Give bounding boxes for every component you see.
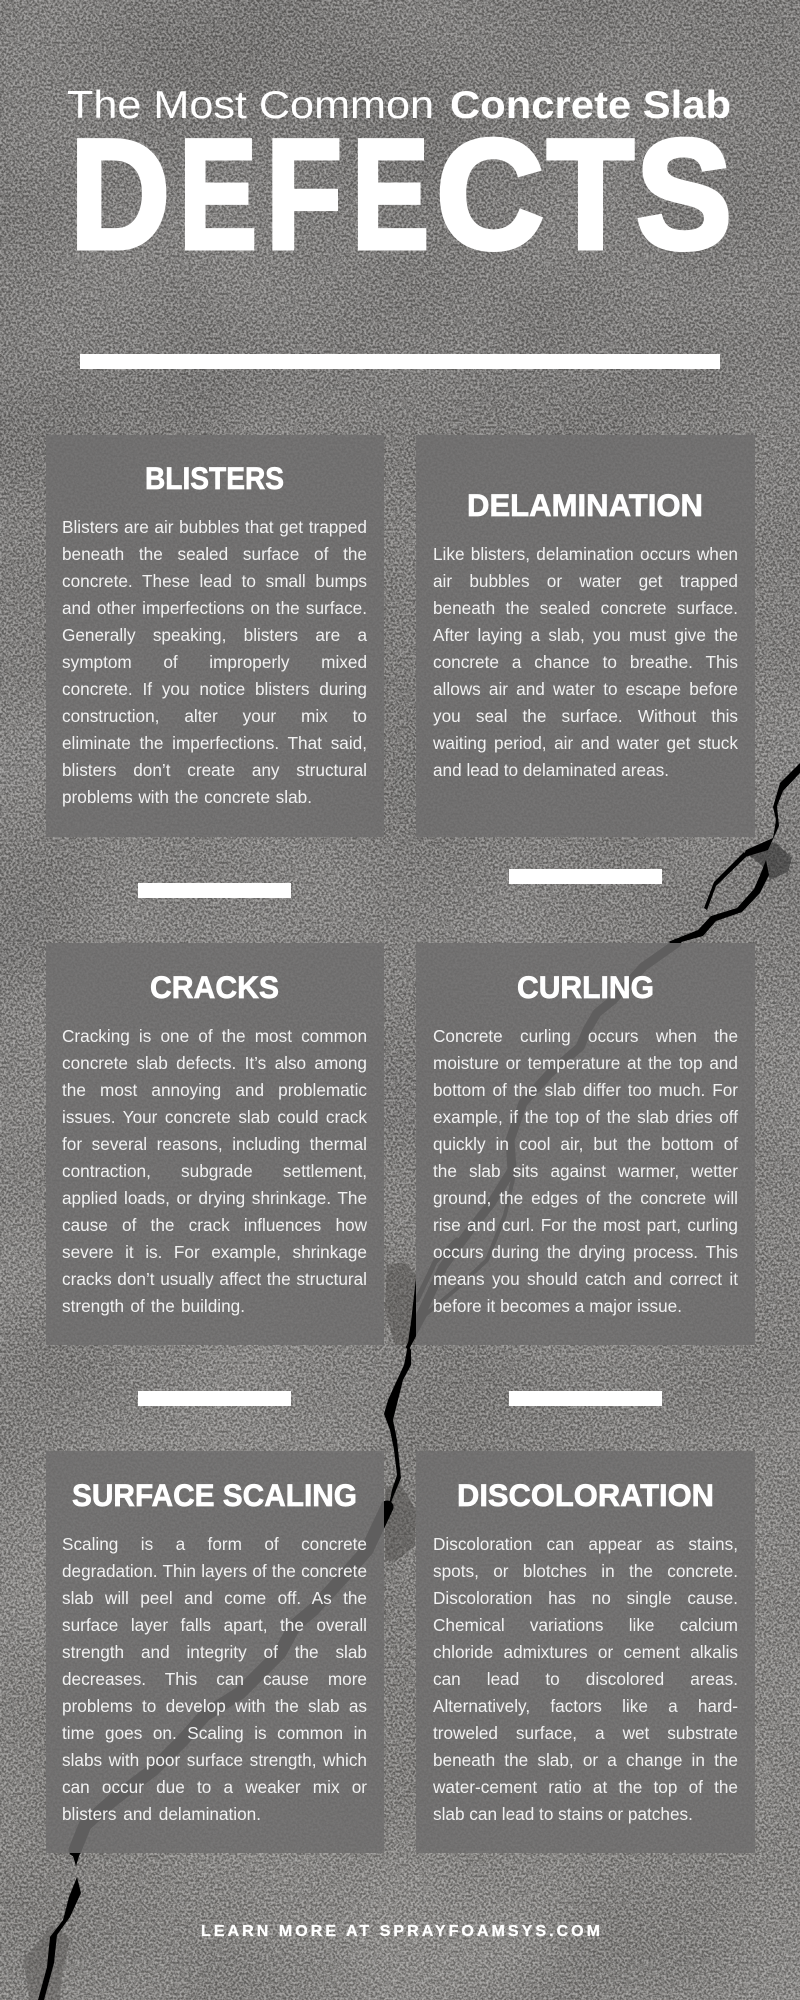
text: discoloration: can lead to discolored areas. [433, 1669, 738, 1689]
text: surface scaling: surface layer falls apart, the overall [62, 1615, 367, 1635]
panel: blisters [46, 435, 384, 837]
heading: defects: D [70, 108, 170, 282]
text: cracks: Cracking is one of the most common [62, 1026, 367, 1046]
heading: discoloration: DISCOLORATION [457, 1477, 714, 1513]
heading: curling: CURLING [517, 969, 654, 1005]
text: cracks: applied loads, or drying shrinkage. The [62, 1188, 367, 1208]
divider: right row 2 [509, 1391, 662, 1406]
crack: portion under panels [75, 943, 677, 1850]
panel: delamination [416, 435, 755, 837]
heading: surface scaling: SURFACE SCALING [72, 1477, 357, 1513]
text: curling: occurs during the drying process. This [433, 1242, 738, 1262]
text: curling [433, 1026, 738, 1316]
text: delamination: you seal the surface. Without this [433, 706, 738, 726]
heading: defects: E [179, 108, 257, 282]
text: delamination: air bubbles or water get trapped [433, 571, 738, 591]
heading: cracks: CRACKS [150, 969, 279, 1005]
text: blisters: concrete. These lead to small bumps [62, 571, 367, 591]
text: delamination: allows air and water to escape before [433, 679, 738, 699]
text: curling: ground, the edges of the concrete will [433, 1188, 738, 1208]
text: discoloration: water-cement ratio at the top of the [433, 1777, 738, 1797]
text: delamination [433, 544, 738, 780]
title [67, 84, 732, 282]
text: blisters: concrete. If you notice blisters during [62, 679, 367, 699]
text: discoloration: slab can lead to stains or patches. [433, 1804, 693, 1824]
text: delamination: and lead to delaminated areas. [433, 760, 669, 780]
text: cracks [62, 1026, 368, 1316]
text: blisters: symptom of improperly mixed [62, 652, 367, 672]
text: cracks: the most annoying and problematic [62, 1080, 367, 1100]
text: surface scaling: time goes on. Scaling is common in [62, 1723, 367, 1743]
text: delamination: concrete a chance to breathe. This [433, 652, 738, 672]
text: surface scaling: slab will peel and come off. As the [62, 1588, 367, 1608]
text: delamination: Like blisters, delamination occurs when [433, 544, 738, 564]
text: curling: the slab sits against warmer, wetter [433, 1161, 738, 1181]
text: discoloration: troweled surface, a wet substrate [433, 1723, 738, 1743]
text: cracks: cause of the crack influences how [62, 1215, 367, 1235]
text: cracks: contraction, subgrade settlement, [62, 1161, 367, 1181]
text: discoloration: spots, or blotches in the concrete. [433, 1561, 738, 1581]
heading: defects: S [636, 108, 732, 282]
panel: curling [416, 943, 755, 1345]
subtitle [67, 84, 731, 127]
text: cracks: for several reasons, including thermal [62, 1134, 367, 1154]
text: delamination: After laying a slab, you must give the [433, 625, 738, 645]
text: cracks: issues. Your concrete slab could crack [62, 1107, 367, 1127]
panel: discoloration [416, 1451, 755, 1853]
text: blisters: problems with the concrete slab. [62, 787, 312, 807]
text: cracks: cracks don’t usually affect the structural [62, 1269, 367, 1289]
text: cracks: concrete slab defects. It’s also among [62, 1053, 367, 1073]
text: surface scaling: can occur due to a weaker mix or [62, 1777, 367, 1797]
text: blisters: Blisters are air bubbles that get trapped [62, 517, 367, 537]
heading: defects: C [436, 108, 544, 282]
text: surface scaling: Scaling is a form of concrete [62, 1534, 367, 1554]
text: curling: moisture or temperature at the top and [433, 1053, 738, 1073]
text: blisters: beneath the sealed surface of the [62, 544, 367, 564]
text: curling: rise and curl. For the most part, curling [433, 1215, 738, 1235]
text: curling: quickly in cool air, but the bottom of [433, 1134, 738, 1154]
text: discoloration: Alternatively, factors like a hard- [433, 1696, 738, 1716]
crack: black fissures [38, 763, 800, 2000]
text: surface scaling: strength and integrity of the slab [62, 1642, 367, 1662]
text: discoloration: Discoloration has no single cause. [433, 1588, 738, 1608]
text: delamination: beneath the sealed concrete surface. [433, 598, 738, 618]
subtitle: Concrete Slab [450, 84, 731, 127]
crack shading [23, 842, 792, 2000]
heading: blisters: BLISTERS [145, 460, 284, 496]
subtitle: The Most Common [67, 84, 434, 127]
text: surface scaling: blisters and delamination. [62, 1804, 261, 1824]
heading: delamination: DELAMINATION [467, 487, 703, 523]
panel: surface scaling [46, 1451, 384, 1853]
text: cracks: severe it is. For example, shrinkage [62, 1242, 367, 1262]
text: discoloration: beneath the slab, or a change in the [433, 1750, 738, 1770]
text: blisters: and other imperfections on the surface. [62, 598, 367, 618]
text: surface scaling: slabs with poor surface strength, which [62, 1750, 367, 1770]
text: surface scaling: decreases. This can cause more [62, 1669, 367, 1689]
text: surface scaling: problems to develop with the slab as [62, 1696, 367, 1716]
text: curling: bottom of the slab differ too much. For [433, 1080, 738, 1100]
text: blisters [62, 517, 368, 807]
heading: defects: E [352, 108, 429, 282]
text: discoloration: Discoloration can appear as stains, [433, 1534, 738, 1554]
text: blisters: construction, alter your mix to [62, 706, 367, 726]
text: cracks: strength of the building. [62, 1296, 245, 1316]
text: surface scaling: degradation. Thin layers of the concrete [62, 1561, 367, 1581]
divider: left row 1 [138, 883, 291, 898]
footer: learn more: LEARN MORE AT SPRAYFOAMSYS.COM [201, 1923, 600, 1940]
text: discoloration [433, 1534, 738, 1824]
text: curling: means you should catch and correct it [433, 1269, 738, 1289]
heading: defects: T [547, 108, 634, 282]
text: surface scaling [62, 1534, 367, 1824]
text: discoloration: chloride admixtures or cement alkalis [433, 1642, 738, 1662]
text: curling: example, if the top of the slab dries off [433, 1107, 738, 1127]
heading: defects: F [266, 108, 342, 282]
text: blisters: Generally speaking, blisters are a [62, 625, 367, 645]
divider: right row 1 [509, 869, 662, 884]
text: discoloration: Chemical variations like calcium [433, 1615, 738, 1635]
divider: left row 2 [138, 1391, 291, 1406]
panel: cracks [46, 943, 384, 1345]
text: delamination: waiting period, air and water get stuck [433, 733, 738, 753]
text: blisters: blisters don’t create any structural [62, 760, 367, 780]
text: curling: Concrete curling occurs when the [433, 1026, 738, 1046]
text: blisters: eliminate the imperfections. That said, [62, 733, 367, 753]
divider: main bar [80, 354, 720, 369]
text: curling: before it becomes a major issue. [433, 1296, 682, 1316]
